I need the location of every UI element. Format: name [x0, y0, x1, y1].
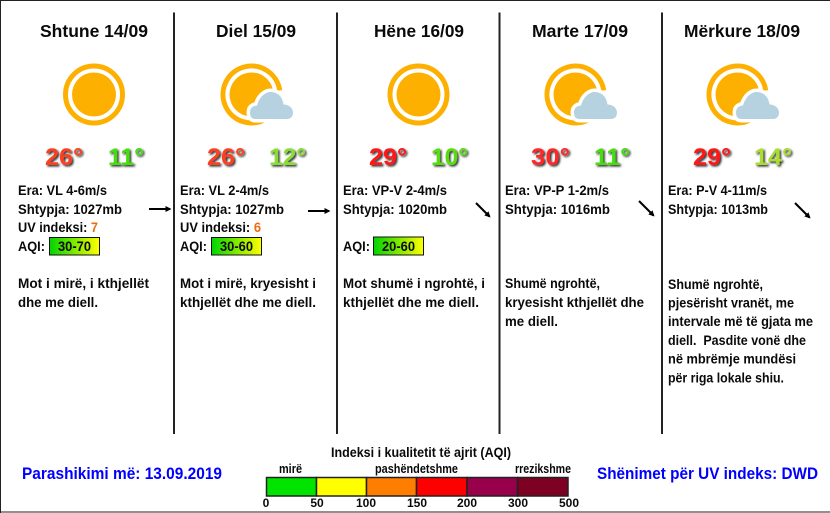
high temperature: 30°: [531, 144, 570, 171]
icon: sun with cloud: [547, 66, 617, 123]
scale numbers: 500: [559, 496, 579, 510]
category labels: [279, 462, 571, 476]
high temperature: 26°: [45, 144, 83, 171]
icon: sun with cloud: [709, 66, 779, 123]
heading: Diel 15/09: [216, 21, 296, 41]
wind: Era: VL 2-4m/s: [180, 182, 269, 198]
panel: Sunday: [180, 21, 329, 310]
high temperature: 29°: [693, 144, 731, 171]
heading: Mërkure 18/09: [684, 21, 800, 41]
AQI: 30-70: [58, 238, 91, 254]
forecast text: kthjellët dhe me diell.: [180, 294, 316, 310]
AQI: [18, 238, 100, 255]
wind: Era: VP-V 2-4m/s: [343, 182, 447, 198]
AQI: AQI:: [18, 238, 45, 254]
wind: Era: VL 4-6m/s: [18, 182, 107, 198]
wind arrow: [639, 201, 654, 216]
pressure: Shtypja: 1020mb: [343, 201, 447, 217]
forecast text: [18, 275, 149, 310]
AQI: 30-60: [220, 238, 253, 254]
forecast text: [343, 275, 485, 310]
panel: Wednesday: [668, 21, 813, 386]
category labels: pashëndetshme: [375, 462, 458, 476]
scale numbers: 200: [457, 496, 477, 510]
pressure: Shtypja: 1027mb: [18, 201, 122, 217]
AQI: 20-60: [382, 238, 415, 254]
legend title: Indeksi i kualitetit të ajrit (AQI): [331, 445, 511, 460]
AQI: [343, 237, 424, 255]
forecast text: [180, 275, 316, 310]
scale numbers: 300: [508, 496, 528, 510]
colour bar: [266, 478, 568, 496]
low temperature: 12°: [269, 144, 306, 171]
scale numbers: 150: [407, 496, 427, 510]
forecast text: Mot i mirë, i kthjellët: [18, 275, 149, 291]
forecast text: [668, 276, 813, 386]
wind arrow: [476, 203, 490, 216]
icon: sun: [390, 66, 447, 123]
low temperature: 14°: [754, 144, 792, 171]
heading: Hëne 16/09: [374, 21, 464, 41]
forecast text: Mot shumë i ngrohtë, i: [343, 275, 485, 291]
icon: sun: [66, 66, 122, 123]
scale numbers: 100: [356, 496, 376, 510]
pressure: Shtypja: 1027mb: [180, 201, 284, 217]
forecast text: intervale më të gjata me: [668, 313, 813, 329]
forecast text: kryesisht kthjellët dhe: [505, 294, 644, 310]
pressure: Shtypja: 1016mb: [505, 201, 610, 217]
forecast text: dhe me diell.: [18, 294, 98, 310]
low temperature: 11°: [594, 144, 630, 171]
forecast text: [505, 275, 644, 329]
forecast text: Shumë ngrohtë,: [668, 276, 763, 292]
AQI: [180, 238, 262, 255]
UV index: UV indeksi: 7: [18, 219, 98, 235]
panel: Saturday: [18, 21, 170, 310]
forecast text: Mot i mirë, kryesisht i: [180, 275, 316, 291]
forecast text: Shumë ngrohtë,: [505, 275, 600, 291]
AQI: AQI:: [343, 238, 370, 254]
wind: Era: VP-P 1-2m/s: [505, 182, 609, 198]
scale numbers: 0: [263, 496, 270, 510]
forecast text: në mbrëmje mundësi: [668, 350, 796, 366]
AQI legend: [263, 445, 579, 510]
heading: Shtune 14/09: [40, 21, 148, 41]
wind arrow: [308, 210, 329, 212]
scale numbers: 50: [310, 496, 324, 510]
panel: Tuesday: [505, 21, 654, 329]
UV index: UV indeksi: 6: [180, 219, 261, 235]
wind arrow: [795, 203, 810, 218]
forecast text: me diell.: [505, 313, 558, 329]
heading: Marte 17/09: [532, 21, 628, 41]
wind: Era: P-V 4-11m/s: [668, 182, 767, 198]
low temperature: 10°: [431, 144, 468, 171]
icon: sun with cloud: [223, 66, 293, 123]
forecast date: Parashikimi më: 13.09.2019: [22, 464, 222, 483]
high temperature: 26°: [207, 144, 245, 171]
high temperature: 29°: [369, 144, 407, 171]
panel: Monday: [343, 21, 490, 310]
scale numbers: [263, 496, 579, 510]
category labels: mirë: [279, 462, 302, 476]
forecast text: kthjellët dhe me diell.: [343, 294, 479, 310]
category labels: rrezikshme: [515, 462, 571, 476]
forecast text: diell. Pasdite vonë dhe: [668, 332, 806, 348]
forecast text: për riga lokale shiu.: [668, 370, 784, 386]
forecast text: pjesërisht vranët, me: [668, 294, 794, 310]
pressure: Shtypja: 1013mb: [668, 201, 768, 217]
low temperature: 11°: [108, 144, 144, 171]
wind arrow: [149, 208, 170, 210]
AQI: AQI:: [180, 238, 207, 254]
